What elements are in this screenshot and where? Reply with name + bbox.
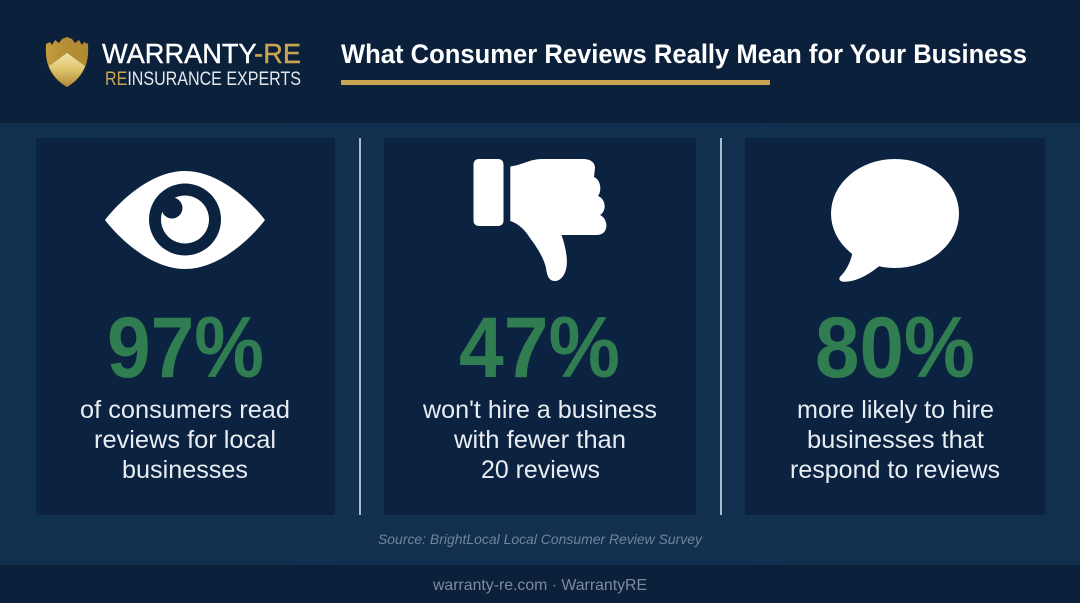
description: with fewer than (453, 426, 626, 454)
panel: 80% (745, 138, 1045, 515)
description: of consumers read (80, 396, 290, 424)
header band (0, 0, 1080, 123)
footer text: warranty-re.com · WarrantyRE (432, 577, 647, 594)
description: reviews for local (94, 426, 276, 454)
title underline (341, 80, 770, 85)
description: won't hire a business (422, 396, 657, 424)
description: businesses (122, 456, 248, 484)
description: 20 reviews (481, 456, 600, 484)
description: businesses that (807, 426, 984, 454)
title: What Consumer Reviews Really Mean for Your Business (341, 39, 1027, 69)
logo tagline: REINSURANCE EXPERTS (105, 69, 301, 90)
footer band (0, 565, 1080, 603)
divider (359, 138, 361, 515)
stat: 47%: 47% (459, 300, 620, 396)
icon: thumbs down (474, 159, 606, 281)
stat: 80%: 80% (815, 300, 975, 396)
panel: 97% (36, 138, 335, 515)
main background (0, 123, 1080, 565)
description: more likely to hire (797, 396, 994, 424)
logo wordmark: WARRANTY-RE (102, 38, 301, 69)
logo (46, 37, 301, 90)
icon: gold shield (46, 37, 88, 87)
description (422, 396, 657, 484)
source note: Source: BrightLocal Local Consumer Review Survey (378, 531, 703, 547)
description: respond to reviews (790, 456, 1000, 484)
panel: 47% (384, 138, 696, 515)
description (790, 396, 1000, 484)
icon: speech bubble (831, 159, 959, 282)
icon: eye (105, 171, 265, 269)
description (80, 396, 290, 484)
stat: 97%: 97% (107, 300, 264, 396)
divider (720, 138, 722, 515)
